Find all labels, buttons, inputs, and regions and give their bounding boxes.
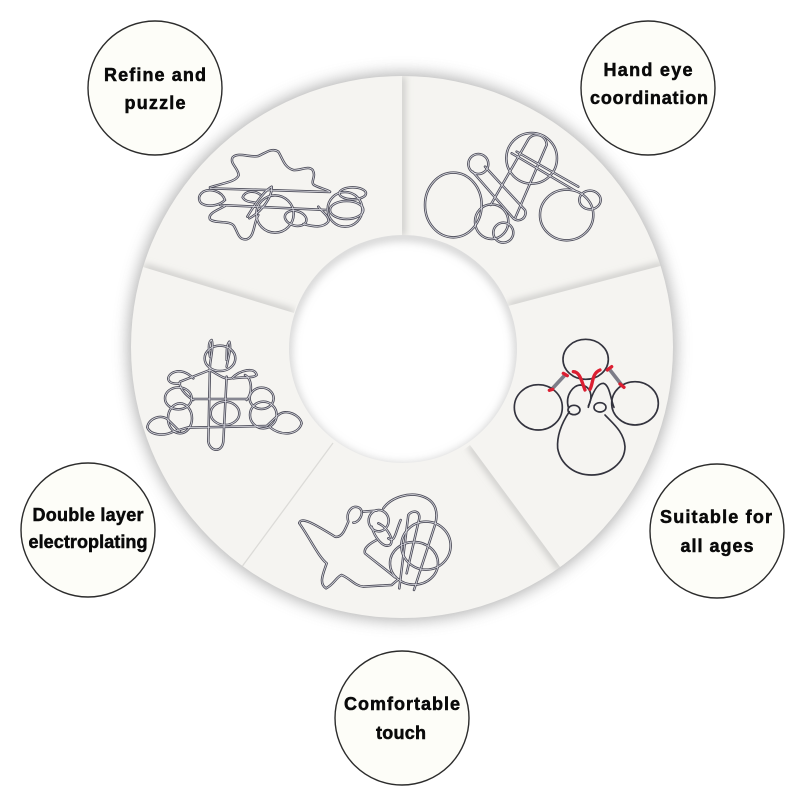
puzzle: pear with red thread <box>514 339 658 475</box>
ring shadow <box>129 74 675 620</box>
badge: double layer electroplating: electroplating <box>28 532 148 552</box>
puzzle: star and bars wire <box>199 150 366 239</box>
badge: comfortable touch <box>335 651 469 785</box>
panel: segmented ring <box>131 76 673 618</box>
puzzle: triangle wire <box>147 340 302 450</box>
badge: hand eye coordination: Hand eye <box>604 60 692 80</box>
badge: hand eye coordination <box>581 21 715 155</box>
badge: double layer electroplating <box>21 463 155 597</box>
center hole <box>287 235 519 468</box>
badge: hand eye coordination: coordination <box>590 88 708 108</box>
badge: refine and puzzle: Refine and <box>104 65 206 85</box>
badge: suitable for all ages <box>650 464 784 598</box>
puzzle: airplane wire <box>299 495 451 590</box>
badge: comfortable touch: Comfortable <box>344 694 460 714</box>
badge: refine and puzzle <box>88 21 222 155</box>
badge: refine and puzzle: puzzle <box>124 93 186 113</box>
badge: comfortable touch: touch <box>376 723 426 743</box>
badge: suitable for all ages: all ages <box>680 536 754 556</box>
badge: suitable for all ages: Suitable for <box>660 507 772 527</box>
badge: double layer electroplating: Double layer <box>32 505 144 525</box>
puzzle: rings and long loops wire <box>425 133 601 243</box>
